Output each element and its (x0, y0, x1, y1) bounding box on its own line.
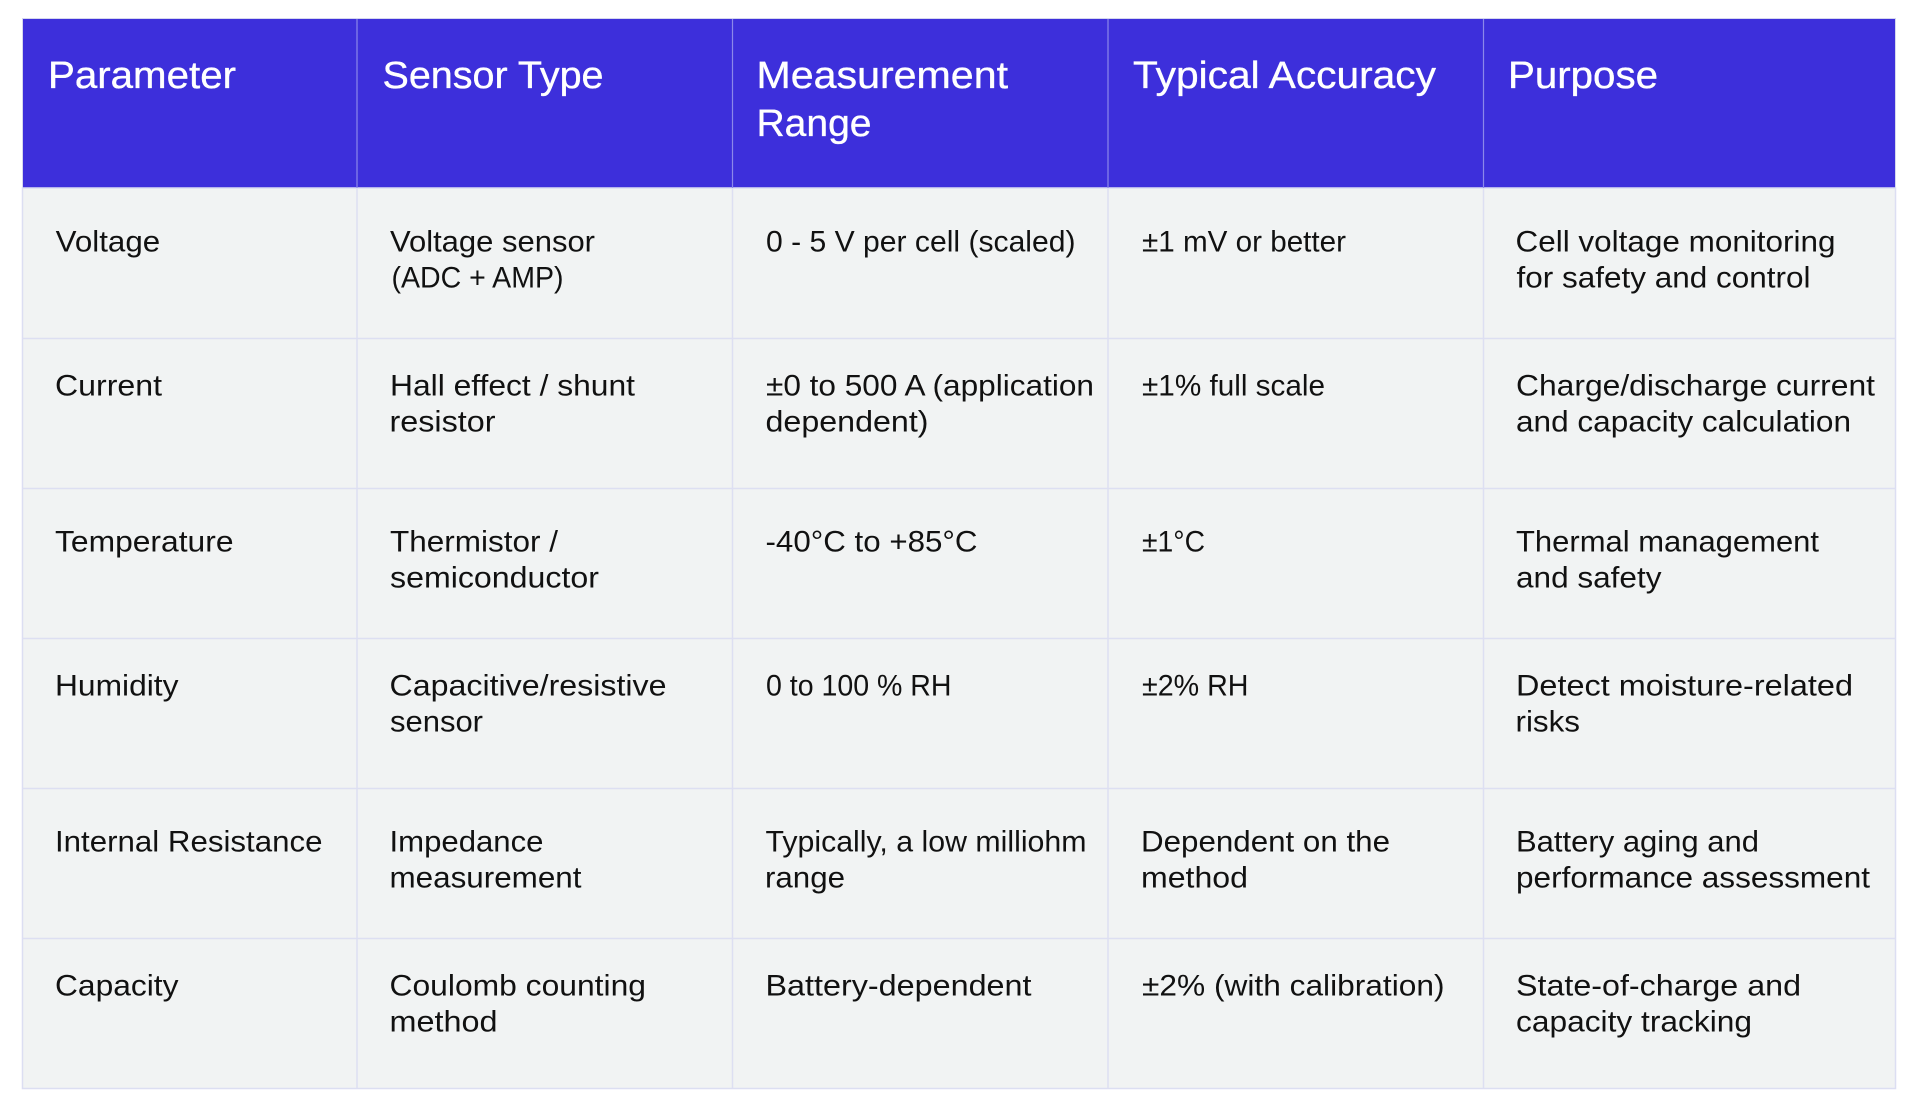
row: Temperature: Temperature (55, 526, 234, 558)
row: Voltage (56, 226, 1836, 294)
header: Typical Accuracy: Typical Accuracy (1133, 55, 1436, 97)
header: Measurement Range: Measurement (756, 55, 1008, 97)
row: Temperature: Thermal management (1516, 526, 1819, 558)
row: Capacity: Capacity (55, 970, 179, 1002)
header row (48, 55, 1658, 145)
row: Humidity: sensor (390, 706, 483, 738)
row: Internal Resistance (55, 826, 1870, 894)
header: Measurement Range (756, 55, 1008, 145)
row: Current: resistor (390, 406, 496, 438)
row: Current: ±0 to 500 A (application (766, 370, 1094, 402)
row: Voltage: (ADC + AMP) (392, 262, 564, 294)
row: Internal Resistance: range (765, 862, 845, 894)
table body background (22, 188, 1896, 1088)
row: Humidity: Detect moisture-related (1516, 670, 1853, 702)
row: Internal Resistance: Typically, a low milliohm (766, 826, 1086, 858)
row: Capacity: capacity tracking (1516, 1006, 1752, 1038)
row: Capacity: method (390, 1006, 498, 1038)
row: Voltage: for safety and control (1516, 262, 1810, 294)
row: Internal Resistance: Impedance (390, 826, 544, 858)
row: Internal Resistance: Internal Resistance (55, 826, 322, 858)
row: Voltage: ±1 mV or better (1142, 226, 1346, 258)
row: Internal Resistance: Battery aging and (1516, 826, 1759, 858)
row: Current: Charge/discharge current (1516, 370, 1875, 402)
row: Capacity: Battery-dependent (766, 970, 1032, 1002)
row: Temperature: and safety (1516, 562, 1662, 594)
row: Capacity: Coulomb counting (390, 970, 646, 1002)
row: Capacity: ±2% (with calibration) (1142, 970, 1444, 1002)
header band (22, 18, 1896, 188)
row: Humidity (55, 670, 1853, 738)
row: Temperature: -40°C to +85°C (766, 526, 978, 558)
row: Current: ±1% full scale (1142, 370, 1325, 402)
row: Humidity: ±2% RH (1142, 670, 1248, 702)
row: Internal Resistance: measurement (390, 862, 582, 894)
row: Humidity: risks (1516, 706, 1580, 738)
row: Humidity: 0 to 100 % RH (766, 670, 952, 702)
row: Capacity (55, 970, 1801, 1038)
row: Current: Current (55, 370, 162, 402)
row: Temperature: semiconductor (390, 562, 599, 594)
row: Temperature: ±1°C (1142, 526, 1205, 558)
row: Internal Resistance: method (1141, 862, 1248, 894)
row: Temperature (55, 526, 1819, 594)
row: Voltage: Voltage (56, 226, 160, 258)
header: Measurement Range: Range (756, 103, 872, 145)
row: Voltage: 0 - 5 V per cell (scaled) (766, 226, 1076, 258)
header: Parameter: Parameter (48, 55, 236, 97)
row: Voltage: Voltage sensor (390, 226, 595, 258)
row: Humidity: Capacitive/resistive (390, 670, 666, 702)
row: Current: dependent) (766, 406, 928, 438)
header: Sensor Type: Sensor Type (382, 55, 604, 97)
row: Voltage: Cell voltage monitoring (1516, 226, 1836, 258)
table body rows (55, 226, 1875, 1038)
row: Internal Resistance: Dependent on the (1141, 826, 1390, 858)
row: Capacity: State-of-charge and (1516, 970, 1801, 1002)
row: Current: Hall effect / shunt (390, 370, 635, 402)
row: Temperature: Thermistor / (390, 526, 559, 558)
row: Internal Resistance: performance assessment (1516, 862, 1870, 894)
row: Current (55, 370, 1875, 438)
row: Humidity: Humidity (55, 670, 179, 702)
row: Current: and capacity calculation (1516, 406, 1851, 438)
header: Purpose: Purpose (1508, 55, 1658, 97)
